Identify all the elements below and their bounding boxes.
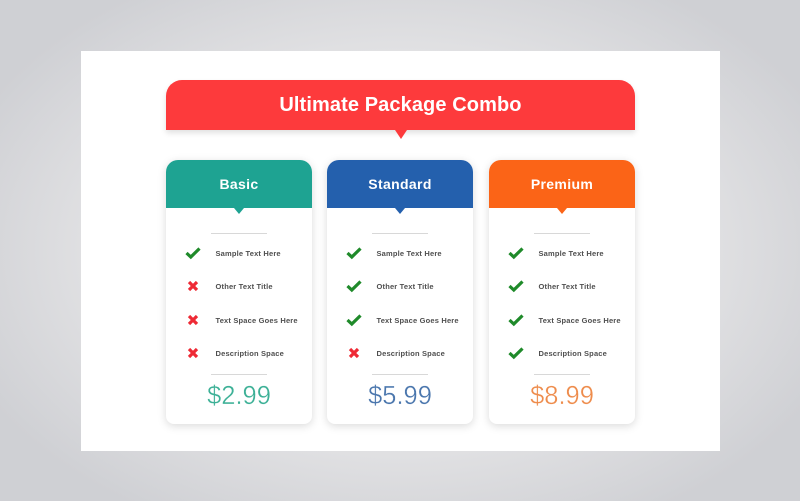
title banner: Ultimate Package Combo [279, 94, 522, 116]
white sheet [81, 51, 720, 451]
basic header pointer [234, 208, 244, 214]
feature: text space: Text Space Goes Here [538, 316, 621, 324]
standard header [327, 160, 473, 208]
standard price: $5.99 [368, 382, 432, 410]
feature: other text [188, 280, 273, 292]
panel: premium [489, 160, 635, 424]
feature: description [188, 348, 284, 358]
feature: sample text [186, 247, 281, 260]
title banner [166, 80, 635, 130]
feature: other text [346, 280, 434, 292]
premium header: Premium [531, 176, 593, 192]
standard header: Standard [368, 176, 432, 192]
feature: other text: Other Text Title [538, 282, 596, 290]
standard header pointer [395, 208, 405, 214]
feature: text space [346, 314, 459, 326]
feature: description [508, 347, 607, 360]
feature: description: Description Space [538, 348, 607, 358]
panel: standard [327, 160, 473, 424]
feature: sample text: Sample Text Here [216, 248, 281, 258]
feature: sample text: Sample Text Here [538, 248, 604, 258]
feature: text space: Text Space Goes Here [216, 316, 298, 324]
feature: other text: Other Text Title [376, 282, 434, 290]
feature: description [348, 348, 445, 358]
basic header [166, 160, 312, 208]
feature: other text [508, 280, 596, 292]
feature: text space: Text Space Goes Here [376, 316, 459, 324]
feature: text space [508, 314, 621, 326]
premium header [489, 160, 635, 208]
feature: sample text [346, 247, 442, 260]
feature: sample text [508, 247, 604, 260]
panel: basic [166, 160, 312, 424]
feature: description: Description Space [216, 348, 284, 358]
feature: other text: Other Text Title [216, 282, 273, 290]
premium header pointer [557, 208, 567, 214]
basic price: $2.99 [207, 382, 271, 410]
feature: sample text: Sample Text Here [376, 248, 442, 258]
basic header: Basic [219, 176, 259, 192]
feature: text space [188, 314, 298, 326]
banner pointer [394, 130, 406, 139]
premium price: $8.99 [530, 382, 594, 410]
feature: description: Description Space [376, 348, 445, 358]
